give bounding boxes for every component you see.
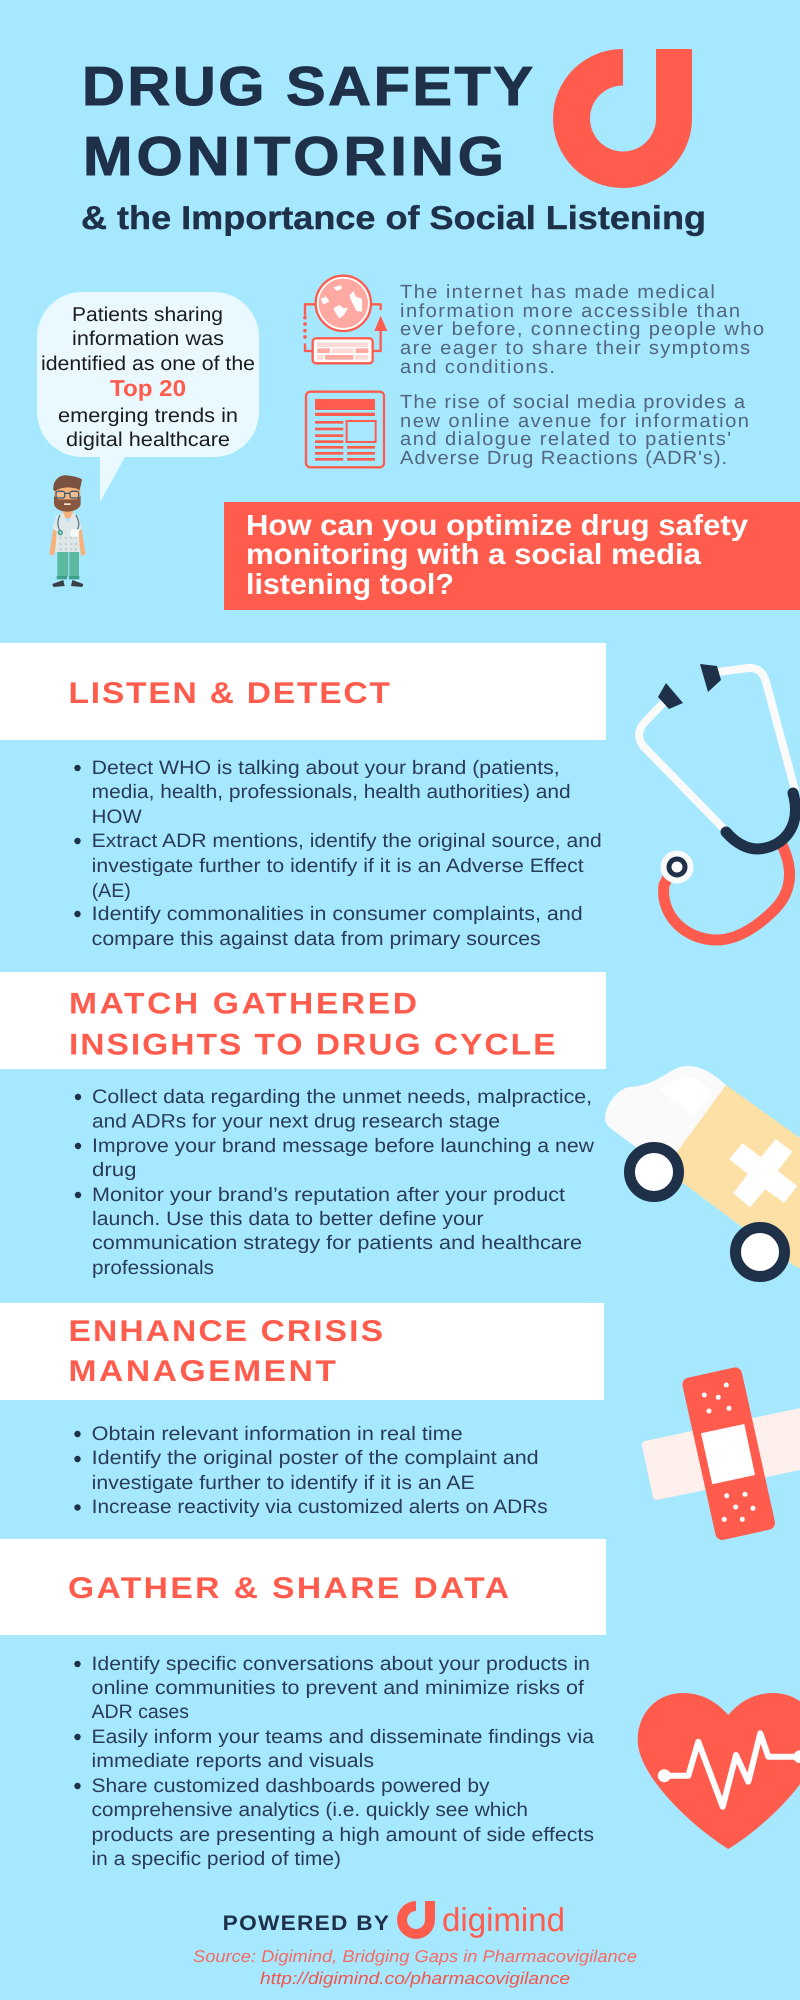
text: internet paragraph: ever before, connecting people who — [400, 319, 764, 340]
source credit: http://digimind.co/pharmacovigilance — [260, 1969, 570, 1988]
wordmark: digimind: digimind — [442, 1901, 565, 1938]
panel: match gathered insights — [0, 972, 606, 1279]
bubble text: information was — [72, 328, 224, 350]
bullet list: match gathered insights: drug — [92, 1159, 136, 1181]
icon: stethoscope — [639, 664, 795, 940]
bullet list: gather and share data: Easily inform your teams and disseminate findings via — [92, 1726, 594, 1748]
source credit: Source: Digimind, Bridging Gaps in Pharmacovigilance — [193, 1947, 637, 1966]
bullet list: gather and share data: online communities to prevent and minimize risks of — [92, 1677, 585, 1699]
logo: small digimind mark — [397, 1901, 435, 1939]
bullet list: listen and detect: investigate further to identify if it is an Adverse Effect — [92, 855, 584, 877]
heading: match gathered insights: MATCH GATHERED — [69, 988, 417, 1020]
bullet list: enhance crisis management — [74, 1423, 548, 1518]
bullet list: gather and share data: ADR cases — [92, 1701, 189, 1723]
bubble text: emerging trends in — [58, 405, 238, 427]
heading: enhance crisis management: MANAGEMENT — [68, 1355, 336, 1388]
icon: newspaper — [306, 392, 384, 467]
title: MONITORING — [83, 125, 504, 187]
text: social media paragraph: Adverse Drug Reactions (ADR's). — [400, 448, 727, 469]
bullet list: gather and share data: immediate reports and visuals — [92, 1750, 374, 1772]
subtitle: & the Importance of Social Listening — [81, 199, 706, 236]
text: social media paragraph — [400, 392, 749, 469]
footer: powered by digimind — [223, 1901, 565, 1939]
callout: question banner: How can you optimize drug safety — [246, 510, 748, 542]
bullet list: listen and detect: Extract ADR mentions, identify the original source, and — [92, 830, 602, 852]
text: internet paragraph: and conditions. — [400, 357, 555, 378]
heading: match gathered insights: INSIGHTS TO DRUG CYCLE — [69, 1028, 556, 1062]
callout: question banner: listening tool? — [246, 569, 454, 601]
panel: listen and detect — [0, 643, 606, 950]
bullet list: listen and detect: HOW — [92, 806, 142, 828]
bullet list: gather and share data: comprehensive analytics (i.e. quickly see which — [92, 1799, 528, 1821]
bullet list: match gathered insights: professionals — [92, 1257, 214, 1279]
bullet list: enhance crisis management: investigate further to identify if it is an AE — [92, 1472, 475, 1494]
bullet list: gather and share data: Share customized dashboards powered by — [92, 1775, 490, 1797]
bubble text: Patients sharing — [72, 304, 223, 326]
icon: heart with pulse — [638, 1693, 800, 1849]
bullet list: match gathered insights: Improve your brand message before launching a new — [92, 1135, 595, 1157]
bullet list: enhance crisis management: Obtain relevant information in real time — [92, 1423, 463, 1445]
heading: listen and detect: LISTEN & DETECT — [68, 677, 390, 710]
text: internet paragraph: The internet has made medical — [400, 282, 715, 303]
footer: powered by digimind: POWERED BY — [223, 1912, 389, 1935]
bullet list: match gathered insights: Monitor your brand’s reputation after your product — [92, 1184, 566, 1206]
heading: enhance crisis management: ENHANCE CRISIS — [68, 1315, 383, 1348]
callout: question banner — [224, 502, 800, 610]
bullet list: listen and detect: media, health, professionals, health authorities) and — [92, 781, 571, 803]
text: social media paragraph: new online avenue for information — [400, 411, 749, 432]
title — [82, 55, 533, 187]
source credit — [193, 1947, 637, 1988]
bubble text: identified as one of the — [41, 353, 255, 375]
bullet list: match gathered insights: communication strategy for patients and healthcare — [92, 1232, 582, 1254]
bullet list: gather and share data: Identify specific conversations about your products in — [92, 1653, 590, 1675]
bullet list: match gathered insights: and ADRs for your next drug research stage — [92, 1110, 500, 1132]
heading: enhance crisis management — [68, 1315, 383, 1388]
text: social media paragraph: and dialogue related to patients' — [400, 429, 731, 450]
icon: bandage — [642, 1366, 800, 1541]
bubble text: Top 20 — [110, 375, 186, 401]
bubble text: digital healthcare — [66, 429, 230, 451]
icon: globe and keyboard — [303, 276, 387, 363]
panel: enhance crisis management — [0, 1303, 604, 1518]
text: social media paragraph: The rise of social media provides a — [400, 392, 746, 413]
icon: ambulance — [605, 1066, 800, 1276]
heading: gather and share data: GATHER & SHARE DATA — [68, 1572, 509, 1605]
text: internet paragraph: information more accessible than — [400, 301, 740, 322]
bullet list: listen and detect: Identify commonalities in consumer complaints, and — [92, 903, 583, 925]
bubble text — [41, 304, 255, 451]
icon: doctor character — [49, 475, 86, 587]
bullet list: gather and share data — [74, 1653, 594, 1870]
bullet list: enhance crisis management: Identify the original poster of the complaint and — [92, 1447, 539, 1469]
title: DRUG SAFETY — [82, 55, 533, 117]
bullet list: listen and detect — [74, 757, 602, 950]
callout: question banner: monitoring with a social media — [246, 539, 702, 571]
logo: digimind mark — [553, 49, 692, 188]
text: internet paragraph: are eager to share their symptoms — [400, 338, 750, 359]
bullet list: gather and share data: in a specific period of time) — [92, 1848, 341, 1870]
bullet list: match gathered insights — [75, 1086, 595, 1279]
text: internet paragraph — [400, 282, 764, 378]
speech bubble — [37, 292, 259, 502]
heading: match gathered insights — [69, 988, 556, 1062]
bullet list: listen and detect: compare this against data from primary sources — [92, 928, 541, 950]
bullet list: gather and share data: products are presenting a high amount of side effects — [92, 1824, 594, 1846]
bullet list: listen and detect: Detect WHO is talking about your brand (patients, — [92, 757, 560, 779]
bullet list: match gathered insights: launch. Use this data to better define your — [92, 1208, 484, 1230]
bullet list: listen and detect: (AE) — [92, 880, 131, 902]
bullet list: enhance crisis management: Increase reactivity via customized alerts on ADRs — [92, 1496, 548, 1518]
panel: gather and share data — [0, 1539, 606, 1870]
bullet list: match gathered insights: Collect data regarding the unmet needs, malpractice, — [92, 1086, 592, 1108]
